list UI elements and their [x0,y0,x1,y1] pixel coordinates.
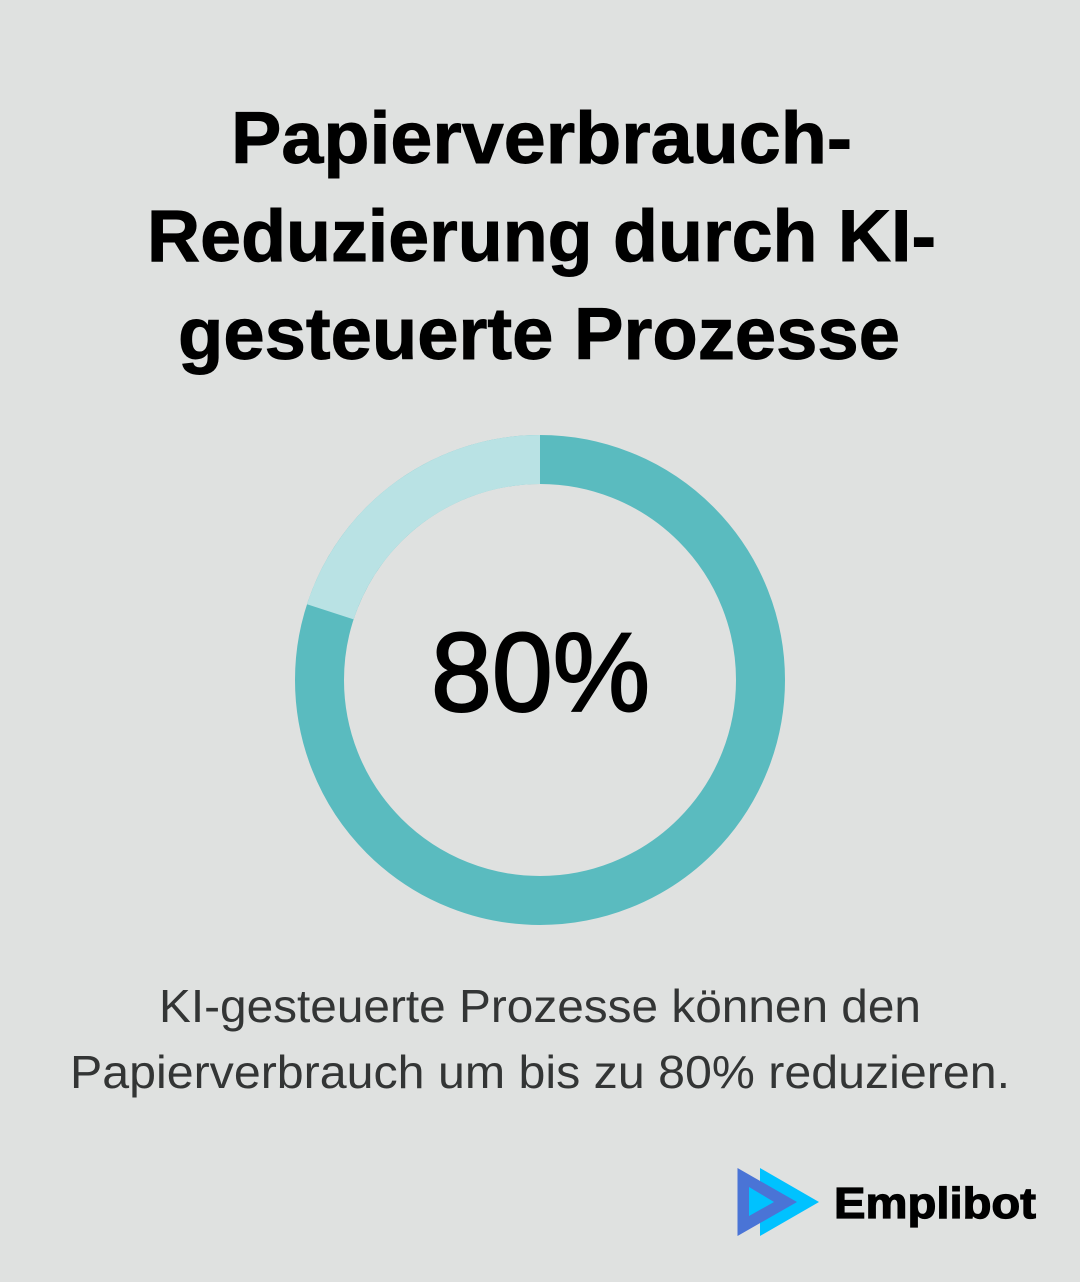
donut chart: 80% [307,435,760,900]
donut value: 80% [431,610,650,735]
logo wordmark: Emplibot [834,1179,1036,1228]
description text [70,980,1010,1098]
title: gesteuerte Prozesse [178,294,900,375]
logo: Emplibot [738,1168,1036,1236]
title [147,98,936,375]
icon: play triangles [738,1168,819,1236]
description text: Papierverbrauch um bis zu 80% reduzieren. [70,1046,1010,1098]
title: Reduzierung durch KI- [147,196,936,277]
description text: KI-gesteuerte Prozesse können den [159,980,921,1032]
title: Papierverbrauch- [231,98,852,179]
